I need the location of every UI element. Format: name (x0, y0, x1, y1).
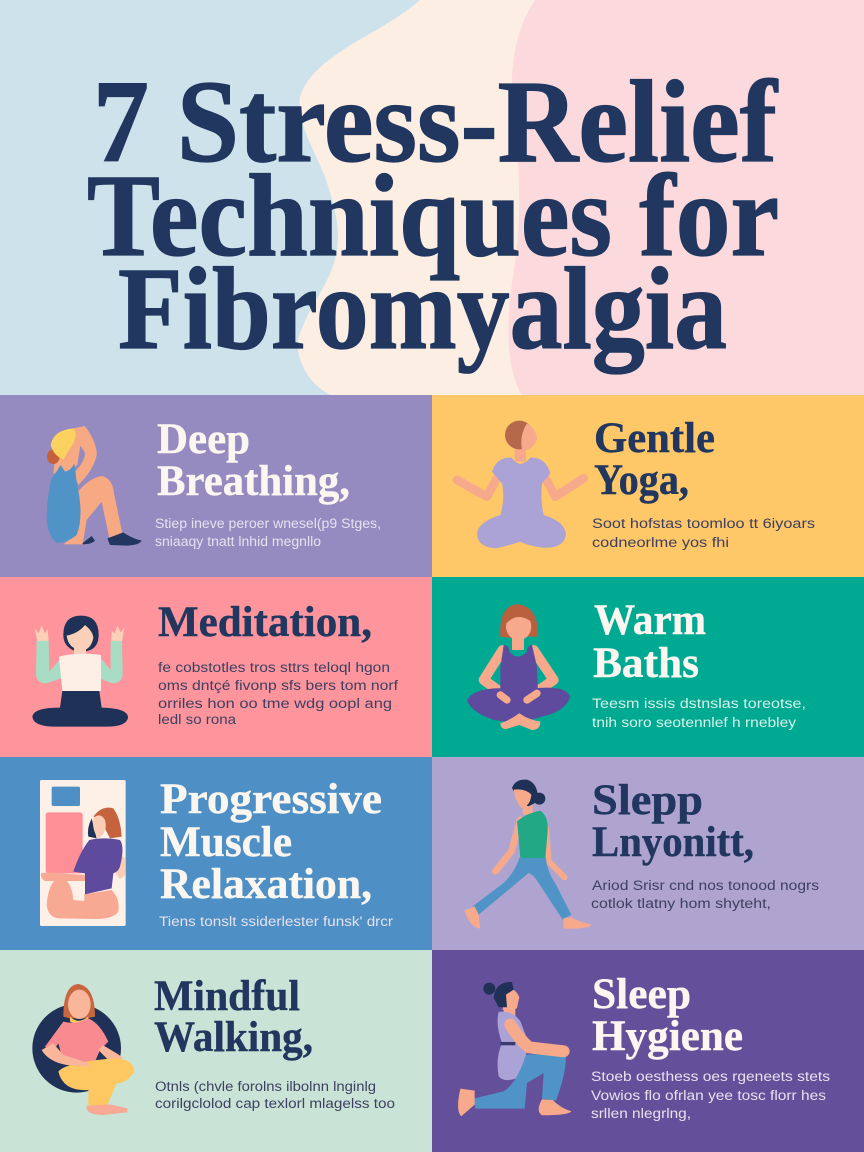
icon: walking figure (464, 780, 592, 929)
icon: seated figure in circle (32, 984, 134, 1115)
heading: Walking, (154, 1014, 313, 1061)
body text: Soot hofstas toomloo tt 6iyoars (592, 516, 815, 531)
panel: mindful walking (0, 950, 432, 1152)
body text: orriles hon oo tme wdg oopl ang (158, 696, 392, 711)
body text: srllen nlegrlng, (591, 1106, 691, 1121)
heading: Slepp (592, 777, 703, 824)
panel: meditation (0, 577, 432, 758)
icon: seated figure holding head (47, 426, 142, 546)
body text: fe cobstotles tros sttrs teloql hgon (158, 660, 390, 675)
heading: Yoga, (594, 457, 689, 504)
body text: cotlok tlatny hom shyteht, (591, 896, 771, 911)
icon: cross-legged figure with hands on knees (467, 604, 570, 730)
body text: Teesm issis dstnslas toreotse, (592, 696, 806, 711)
heading: Relaxation, (160, 861, 372, 908)
panel: gentle yoga (432, 395, 864, 577)
body text: corilgclolod cap texlorl mlagelss too (155, 1096, 395, 1111)
heading: Mindful (154, 973, 300, 1020)
heading: Hygiene (592, 1013, 743, 1060)
header background (0, 0, 864, 396)
heading: Sleep (592, 971, 691, 1018)
body text: Stiep ineve peroer wnesel(p9 Stges, (155, 516, 381, 531)
panel: deep breathing (0, 395, 432, 577)
body text: Ariod Srisr cnd nos tonood nogrs (592, 878, 819, 893)
body text: Stoeb oesthess oes rgeneets stets (591, 1069, 830, 1084)
body text: oms dntçé fivonp sfs bers tom norf (158, 678, 398, 693)
icon: seated figure with raised hands (32, 616, 128, 727)
heading: Muscle (160, 819, 292, 866)
icon: kneeling figure (458, 982, 571, 1116)
title: 7 Stress-Relief (93, 56, 779, 187)
heading: Deep (157, 416, 250, 463)
title: Techniques for (87, 150, 779, 281)
panel: sleep hygiene (432, 950, 864, 1152)
body text: Otnls (chvle forolns ilbolnn lnginlg (155, 1079, 376, 1094)
heading: Lnyonitt, (592, 819, 754, 866)
body text: tnih soro seotennlef h rnebley (592, 715, 796, 730)
panel: sleep layout (432, 757, 864, 950)
body text: Tiens tonslt ssiderlester funsk' drcr (159, 914, 394, 929)
heading: Warm (594, 597, 706, 644)
heading: Meditation, (158, 599, 372, 646)
body text: sniaaqy tnatt lnhid megnllo (155, 534, 321, 549)
body text: Vowios flo ofrlan yee tosc florr hes (591, 1088, 826, 1103)
title (87, 56, 779, 374)
title: Fibromyalgia (118, 243, 727, 374)
icon: resting figure on card (40, 780, 126, 926)
heading: Gentle (594, 415, 715, 462)
icon: cross-legged figure with open arms (457, 421, 584, 548)
heading: Breathing, (157, 458, 350, 505)
panel: progressive muscle relaxation (0, 757, 432, 950)
body text: ledl so rona (158, 712, 237, 727)
heading: Progressive (160, 776, 382, 823)
panel: warm baths (432, 577, 864, 758)
heading: Baths (593, 640, 699, 687)
body text: codneorlme yos fhi (592, 535, 729, 550)
